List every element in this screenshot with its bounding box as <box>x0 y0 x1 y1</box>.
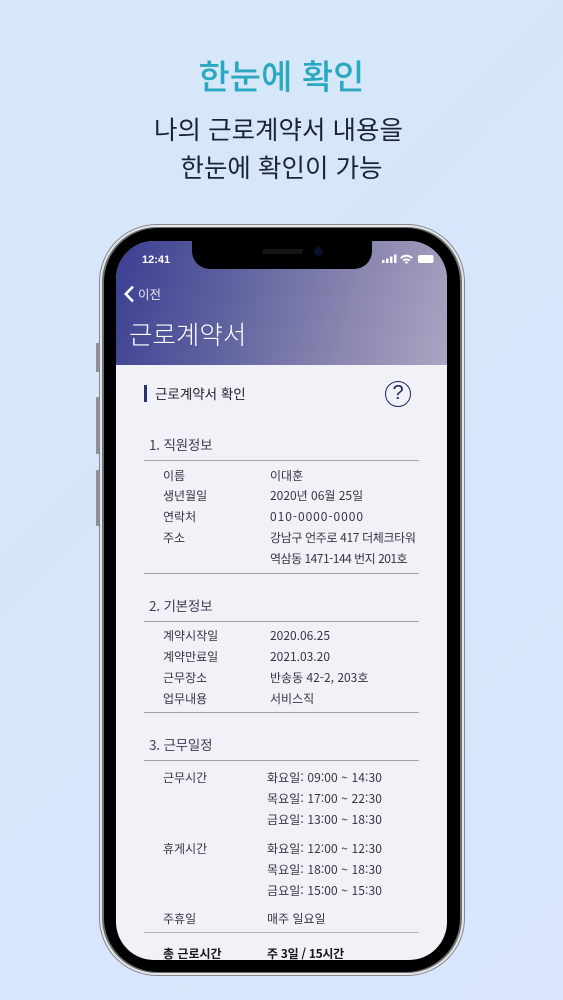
icon: help question mark: ? <box>392 382 404 404</box>
side buttons <box>96 343 99 526</box>
section: work schedule: 휴게시간 <box>163 840 207 857</box>
section: work schedule: 화요일: 12:00 ~ 12:30 <box>267 840 382 857</box>
section: employee info: 강남구 언주로 417 더체크타워 <box>270 529 416 546</box>
section: employee info: 역삼동 1471-144 번지 201호 <box>270 550 407 567</box>
screen heading: 근로계약서 <box>129 315 246 352</box>
section: work schedule: 금요일: 13:00 ~ 18:30 <box>267 811 382 828</box>
icon: speaker <box>262 249 303 254</box>
section: work schedule: 매주 일요일 <box>267 910 326 927</box>
section: employee info: 이대훈 <box>270 467 303 484</box>
section: work schedule: 금요일: 15:00 ~ 15:30 <box>267 882 382 899</box>
back label: 이전 <box>138 284 161 303</box>
section: basic info: 서비스직 <box>270 690 314 707</box>
section: basic info: 계약시작일 <box>163 627 218 644</box>
section: employee info: 010-0000-0000 <box>270 508 364 525</box>
header gradient band <box>116 241 447 365</box>
phone screen <box>116 241 447 960</box>
section: basic info: 2021.03.20 <box>270 648 330 665</box>
section: work schedule <box>144 734 419 960</box>
phone frame <box>99 224 465 976</box>
section: work schedule: 근무시간 <box>163 769 207 786</box>
icon: status bar signal, wifi and battery <box>382 254 434 264</box>
section: work schedule: 목요일: 17:00 ~ 22:30 <box>267 790 382 807</box>
section: employee info: 주소 <box>163 529 185 546</box>
notch <box>192 241 372 269</box>
section: employee info: 2020년 06월 25일 <box>270 487 363 504</box>
back button <box>124 284 161 303</box>
phone bezel <box>104 228 460 972</box>
section: employee info: 생년월일 <box>163 487 207 504</box>
section: basic info: 업무내용 <box>163 690 207 707</box>
section: work schedule: 목요일: 18:00 ~ 18:30 <box>267 861 382 878</box>
section: work schedule: 주휴일 <box>163 910 196 927</box>
section marker bar <box>144 385 147 402</box>
phone mockup <box>96 224 465 976</box>
section: basic info: 계약만료일 <box>163 648 218 665</box>
subtitle <box>154 110 403 185</box>
heading: work schedule: 3. 근무일정 <box>149 734 212 754</box>
section: basic info: 근무장소 <box>163 669 207 686</box>
section: basic info: 반송동 42-2, 203호 <box>270 669 368 686</box>
title: 한눈에 확인 <box>199 50 364 99</box>
icon: camera <box>314 247 323 256</box>
heading: employee info: 1. 직원정보 <box>149 434 212 454</box>
section: basic info: 2020.06.25 <box>270 627 330 644</box>
section: work schedule: 화요일: 09:00 ~ 14:30 <box>267 769 382 786</box>
heading: basic info: 2. 기본정보 <box>149 595 212 615</box>
phone frame inner edge <box>102 227 462 973</box>
icon: help question mark <box>385 381 411 407</box>
card heading: 근로계약서 확인 <box>155 383 246 403</box>
status time: 12:41 <box>142 254 170 266</box>
section: employee info <box>144 434 419 574</box>
subtitle: 한눈에 확인이 가능 <box>181 148 382 185</box>
section: employee info: 연락처 <box>163 508 196 525</box>
section: employee info: 이름 <box>163 467 185 484</box>
subtitle: 나의 근로계약서 내용을 <box>154 110 403 147</box>
section: basic info <box>144 595 419 713</box>
icon: back chevron <box>124 286 134 302</box>
